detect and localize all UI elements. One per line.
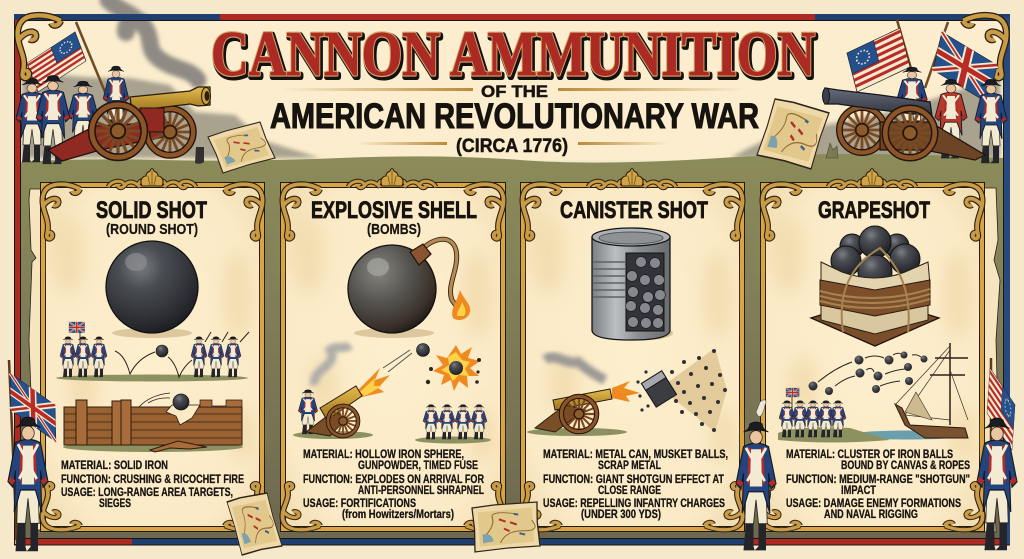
heading: SOLID SHOT bbox=[96, 197, 207, 224]
facts: USAGE: LONG-RANGE AREA TARGETS, bbox=[61, 485, 233, 499]
subtitle: circa 1776 bbox=[357, 136, 668, 157]
facts: USAGE: FORTIFICATIONS bbox=[303, 496, 416, 510]
US flag bbox=[27, 32, 86, 92]
map top-left bbox=[208, 121, 275, 173]
soldiers bbox=[16, 66, 129, 164]
facts bbox=[543, 447, 728, 521]
facts: MATERIAL: CLUSTER OF IRON BALLS bbox=[786, 447, 953, 461]
subtitle: circa 1776: (CIRCA 1776) bbox=[456, 136, 568, 157]
facts: USAGE: REPELLING INFANTRY CHARGES bbox=[543, 496, 725, 510]
icon: tin canister bbox=[592, 228, 673, 340]
facts: SIEGES bbox=[99, 496, 131, 510]
frame corner ornaments bbox=[762, 169, 983, 530]
facts: USAGE: DAMAGE ENEMY FORMATIONS bbox=[786, 496, 961, 510]
panel: canister shot bbox=[522, 169, 743, 530]
facts: BOUND BY CANVAS & ROPES bbox=[841, 458, 970, 472]
facts: (UNDER 300 YDS) bbox=[581, 507, 661, 521]
facts bbox=[303, 447, 484, 521]
panel frame bbox=[523, 185, 742, 529]
soldiers bbox=[897, 67, 927, 135]
panel: grapeshot bbox=[762, 169, 983, 530]
map bottom-centre bbox=[472, 501, 540, 552]
facts: MATERIAL: SOLID IRON bbox=[61, 458, 168, 472]
facts: GUNPOWDER, TIMED FUSE bbox=[358, 458, 478, 472]
facts: SCRAP METAL bbox=[598, 458, 661, 472]
title: CANNON AMMUNITION bbox=[212, 20, 816, 91]
figure: soldier with american flag bbox=[977, 358, 1017, 550]
heading: GRAPESHOT bbox=[818, 197, 930, 224]
gunsmoke clouds left bbox=[22, 68, 320, 158]
facts: AND NAVAL RIGGING bbox=[824, 507, 918, 521]
gunsmoke clouds right bbox=[730, 70, 1000, 158]
corner ornament top-right bbox=[963, 15, 1006, 78]
US flag bbox=[847, 28, 910, 92]
facts: ANTI-PERSONNEL SHRAPNEL bbox=[358, 483, 484, 497]
facts: FUNCTION: EXPLODES ON ARRIVAL FOR bbox=[303, 472, 484, 486]
brass cannon bbox=[48, 87, 210, 161]
facts bbox=[61, 458, 244, 510]
subheading: (BOMBS) bbox=[367, 222, 421, 238]
facts bbox=[786, 447, 970, 521]
panel: solid shot bbox=[42, 169, 263, 530]
heading: CANISTER SHOT bbox=[560, 197, 708, 224]
flag pole bbox=[76, 22, 105, 92]
figure: british soldier with flag bbox=[8, 360, 56, 551]
frame corner ornaments bbox=[282, 169, 504, 530]
panel frame bbox=[283, 185, 503, 529]
title: CANNON AMMUNITION bbox=[211, 18, 815, 89]
ground bbox=[20, 154, 1004, 540]
heading: EXPLOSIVE SHELL bbox=[311, 197, 477, 224]
facts: MATERIAL: HOLLOW IRON SPHERE, bbox=[303, 447, 464, 461]
icon: round shot bbox=[106, 241, 198, 338]
facts: FUNCTION: GIANT SHOTGUN EFFECT AT bbox=[543, 472, 724, 486]
powder bucket bbox=[195, 147, 204, 164]
grass tuft bbox=[826, 143, 838, 158]
icon: bomb with fuse bbox=[348, 239, 470, 338]
torn parchment strips bbox=[29, 188, 1000, 532]
frame corner ornaments bbox=[42, 169, 263, 530]
canister firing scene bbox=[527, 348, 727, 436]
figure: officer with plume bbox=[736, 400, 776, 550]
UK flag bbox=[933, 32, 997, 103]
facts: IMPACT bbox=[841, 483, 876, 497]
top-right scene: flags, soldiers, iron cannon bbox=[822, 20, 1007, 163]
facts: FUNCTION: CRUSHING & RICOCHET FIRE bbox=[61, 472, 244, 486]
ricochet scene bbox=[56, 322, 249, 382]
iron cannon bbox=[822, 88, 985, 160]
panel frame bbox=[43, 185, 262, 529]
subtitle: of the bbox=[283, 82, 746, 101]
corner ornament top-left bbox=[18, 15, 61, 78]
panel: explosive shell bbox=[282, 169, 504, 530]
subtitle: american revolutionary war: AMERICAN REVOLUTIONARY WAR bbox=[270, 97, 759, 136]
frame corner ornaments bbox=[522, 169, 743, 530]
icon: grapeshot bundle bbox=[811, 226, 939, 346]
title: CANNON AMMUNITION bbox=[211, 18, 815, 89]
top-left scene: flag, soldiers, brass cannon bbox=[16, 22, 210, 164]
facts: CLOSE RANGE bbox=[598, 483, 661, 497]
drifting smoke column bbox=[108, 0, 198, 80]
subheading: (ROUND SHOT) bbox=[106, 222, 198, 238]
subtitle: of the: OF THE bbox=[481, 82, 548, 101]
panel frame bbox=[763, 185, 982, 529]
grapeshot fire scene bbox=[778, 343, 968, 442]
flag poles bbox=[897, 20, 948, 88]
map bottom-left bbox=[227, 492, 282, 555]
wooden wall scene bbox=[63, 393, 243, 452]
map top-right bbox=[757, 98, 829, 169]
air-burst scene bbox=[415, 345, 491, 444]
facts: (from Howitzers/Mortars) bbox=[342, 507, 454, 521]
facts: MATERIAL: METAL CAN, MUSKET BALLS, bbox=[543, 447, 728, 461]
firing cannon scene bbox=[293, 344, 430, 439]
